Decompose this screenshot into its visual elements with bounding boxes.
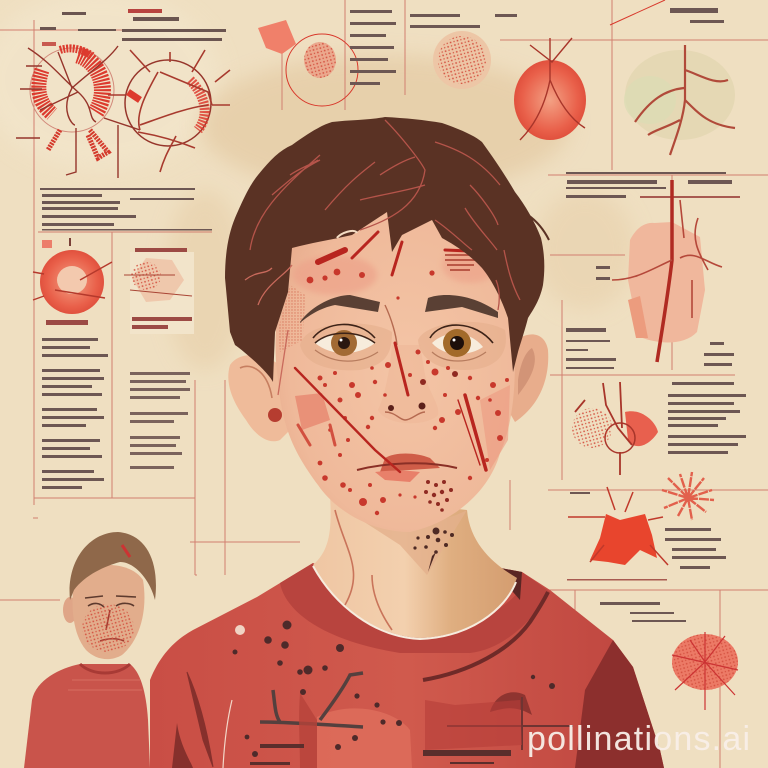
diagram: pale spotted circle <box>433 31 491 89</box>
text block: sphere captions <box>46 248 192 329</box>
freckles <box>307 269 509 515</box>
text block: right lower list <box>668 382 746 454</box>
shirt light torso <box>317 708 412 768</box>
eye left <box>313 324 378 361</box>
text block: top left header <box>40 9 226 46</box>
text block: right column heading <box>566 172 740 198</box>
neck marks <box>413 528 454 572</box>
text block: lower left list <box>42 338 108 489</box>
hair wisp <box>528 215 549 240</box>
text block: burst captions <box>567 492 726 622</box>
figure: main boy <box>150 117 664 768</box>
diagram: red vessel ring left <box>16 46 140 178</box>
diagram: red organ <box>514 38 586 140</box>
text block: top right label <box>670 8 724 23</box>
nostrils <box>388 402 426 411</box>
face stipple left <box>278 285 305 352</box>
panel: top centre diagrams <box>258 10 517 106</box>
shirt spots <box>232 620 555 757</box>
shirt <box>150 563 664 768</box>
diagram: branching pale organ <box>624 45 735 155</box>
shirt dark sleeve <box>575 640 664 768</box>
neck <box>313 495 517 638</box>
diagram: branching red mark <box>572 382 658 475</box>
diagram: salmon mark <box>258 20 296 54</box>
scratches <box>295 232 518 472</box>
panel: top-left vessel diagrams <box>16 46 230 178</box>
diagram: red vessel ring right <box>108 50 230 172</box>
shirt folds <box>187 672 213 767</box>
eye right <box>430 325 493 361</box>
child face <box>72 565 144 659</box>
collar dark back <box>495 567 522 600</box>
child freckles <box>82 604 134 652</box>
ear right <box>508 334 548 422</box>
forehead rash <box>293 255 377 295</box>
text block: right middle list <box>566 266 734 369</box>
diagram: red sphere <box>33 238 112 314</box>
hatched forehead patch <box>445 255 476 270</box>
ear left <box>228 355 290 441</box>
diagram: skin circle <box>286 34 358 106</box>
eyebrow right <box>425 295 498 318</box>
diagram: radial burst <box>662 472 714 520</box>
cheek patches <box>295 393 330 430</box>
shirt hem text <box>250 744 511 765</box>
face <box>275 204 515 532</box>
child eyes and mouth <box>85 596 136 641</box>
text block: upper left list <box>40 188 212 230</box>
diagram: hand-shaped organ <box>612 180 722 362</box>
nose <box>378 345 438 423</box>
child shirt <box>24 664 150 768</box>
diagram: pale sphere panel <box>124 252 194 334</box>
child hair <box>70 532 156 600</box>
text block: centre left list <box>130 372 190 469</box>
eyebrow left <box>300 295 380 323</box>
diagram: red bottom right flower <box>672 632 738 710</box>
watermark: pollinations.ai <box>527 720 750 758</box>
hair strands <box>245 120 520 395</box>
eye sockets <box>300 323 392 370</box>
shirt collar band <box>280 563 550 653</box>
hair <box>225 117 544 382</box>
diagram: red splatter <box>568 487 668 565</box>
child ear <box>63 597 77 623</box>
figure: small child <box>24 532 156 768</box>
panel: top right diagrams <box>514 0 735 155</box>
text block: top centre columns <box>350 10 517 85</box>
shirt branching mark <box>260 673 363 727</box>
mouth <box>357 454 457 482</box>
